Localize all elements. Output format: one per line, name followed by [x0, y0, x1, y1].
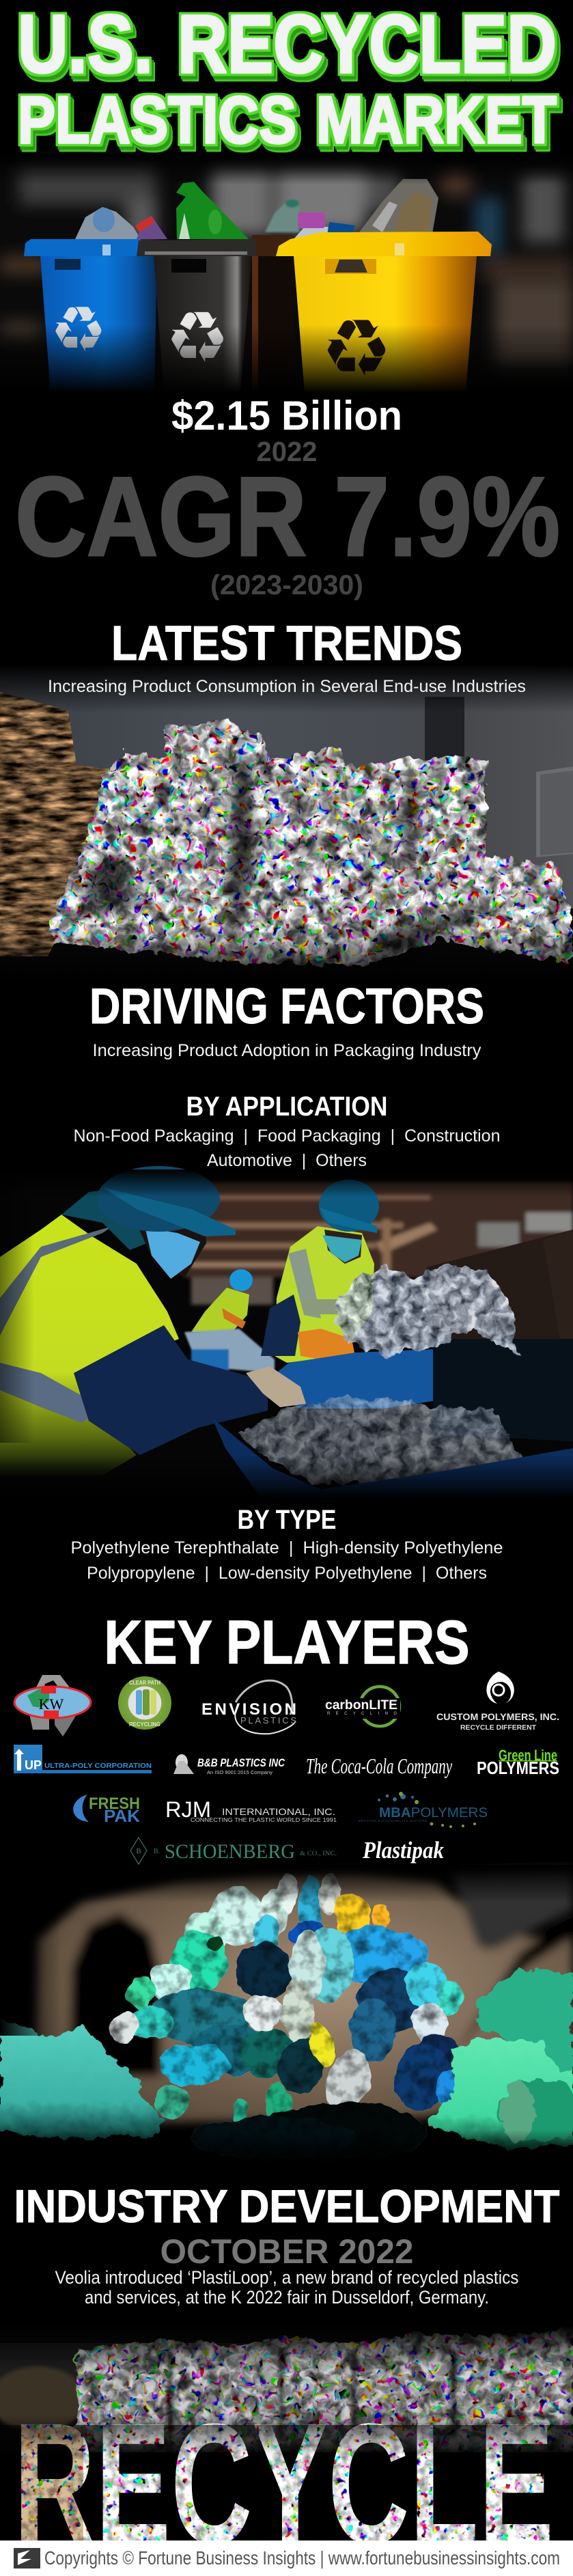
logo: RJM International: INTERNATIONAL, INC.	[222, 1806, 335, 1817]
logo: Ultra-Poly: ULTRA-POLY CORPORATION	[44, 1762, 152, 1770]
photo: ball of plastic bottles	[0, 1865, 573, 2179]
driving factor text: Increasing Product Adoption in Packaging Industry	[93, 1041, 481, 1060]
logo: B. Schoenberg	[130, 1838, 337, 1864]
title: U.S.	[18, 0, 153, 90]
ceiling beams	[184, 1182, 573, 1305]
bottles on back belt	[184, 1329, 275, 1373]
grey plastic bag	[357, 179, 438, 238]
heading: driving factors: DRIVING FACTORS	[89, 979, 484, 1034]
plastic bag	[335, 1264, 520, 1359]
blue behind bottle	[326, 222, 355, 239]
fades	[0, 1865, 573, 1902]
photo: baled plastic piles	[0, 665, 573, 991]
photo: plastic piles behind recycle lettering	[0, 2327, 573, 2452]
lead worker vest	[0, 1166, 306, 1476]
logo: KW: KW	[39, 1695, 64, 1713]
yellow bin	[276, 232, 492, 395]
logo: B. Schoenberg: B.	[154, 1848, 160, 1855]
logo: Clear Path Recycling: CLEAR PATH	[129, 1680, 160, 1686]
blurred warehouse backdrop	[0, 163, 573, 367]
far worker	[191, 1269, 253, 1332]
type list line 1: Polyethylene Terephthalate | High-density Polyethylene	[71, 1538, 503, 1557]
trend text: Increasing Product Consumption in Several End-use Industries	[48, 677, 526, 696]
logo: RJM International: RJM	[165, 1797, 211, 1822]
clear bag with blue bottle	[75, 207, 167, 239]
logo: MBA Polymers: MBAPOLYMERS	[379, 1805, 488, 1820]
logo: Coca-Cola: The Coca-Cola Company	[306, 1754, 453, 1778]
development date: OCTOBER 2022	[160, 2232, 414, 2271]
logo: Custom Polymers: RECYCLE DIFFERENT	[460, 1724, 536, 1732]
black bin: ♻	[165, 296, 229, 379]
title: PLASTICS	[18, 83, 296, 157]
wall columns	[425, 697, 464, 762]
logo: RJM International: CONNECTING THE PLASTIC WORLD SINCE 1991	[191, 1816, 337, 1823]
cardboard bales	[0, 690, 113, 960]
type list line 2: Polypropylene | Low-density Polyethylene | Others	[87, 1564, 487, 1583]
heading: by application: BY APPLICATION	[186, 1092, 388, 1122]
footer	[0, 2540, 573, 2576]
logo: MBA Polymers	[359, 1792, 488, 1828]
black bin	[137, 239, 256, 393]
second worker	[261, 1180, 379, 1363]
logo: Envision Plastics: PLASTICS	[240, 1715, 296, 1726]
logo: Envision Plastics: ENVISION	[201, 1700, 296, 1719]
logo: Ultra-Poly	[14, 1745, 152, 1773]
logo: Ultra-Poly: UP	[25, 1758, 42, 1772]
forecast period: (2023-2030)	[210, 569, 363, 600]
application list line 1: Non-Food Packaging | Food Packaging | Construction	[74, 1126, 500, 1146]
development text line 1: Veolia introduced ‘PlastiLoop’, a new brand of recycled plastics	[55, 2267, 519, 2288]
logo: carbonLITE	[325, 1687, 400, 1726]
logo: B&B Plastics: An ISO 9001:2015 Company	[207, 1769, 272, 1775]
blue bin: ♻	[51, 293, 107, 366]
logo: Fresh Pak: FRESH	[89, 1795, 140, 1813]
heading: latest trends: LATEST TRENDS	[111, 617, 462, 671]
logo: Fresh Pak: PAK	[104, 1807, 140, 1826]
crevices	[82, 758, 492, 960]
fades	[0, 665, 573, 712]
base year: 2022	[257, 436, 317, 467]
blue bin	[24, 239, 157, 393]
logo: B. Schoenberg: B	[136, 1847, 141, 1855]
pale background bottle	[265, 199, 299, 232]
sphere of bottles	[110, 1873, 467, 2160]
logo: B. Schoenberg: SCHOENBERG	[165, 1840, 295, 1863]
right dark panels	[427, 1230, 573, 1339]
development text line 2: and services, at the K 2022 fair in Dusseldorf, Germany.	[85, 2287, 489, 2308]
dim piles	[76, 2329, 573, 2463]
left brown bale	[0, 2366, 85, 2432]
logo: MBA Polymers: BECAUSE SUSTAINABILITY MATTERS	[359, 1819, 427, 1823]
front conveyor rim	[212, 1417, 573, 1503]
logo: Green Line Polymers: POLYMERS	[477, 1758, 559, 1778]
logo: Green Line Polymers	[477, 1747, 559, 1778]
logo: carbonLITE: carbonLITE	[325, 1698, 397, 1713]
logo: Custom Polymers	[436, 1672, 559, 1732]
yellow bin: ♻	[321, 303, 392, 395]
fades	[0, 1169, 573, 1197]
fades	[0, 154, 573, 184]
logo: Envision Plastics	[201, 1680, 296, 1734]
heading: by type: BY TYPE	[238, 1505, 336, 1535]
brown bin	[252, 235, 295, 393]
logo: Clear Path Recycling	[118, 1676, 171, 1730]
application list line 2: Automotive | Others	[207, 1151, 367, 1170]
soft top of lettering	[0, 2425, 573, 2456]
logo: carbonLITE: RECYCLING	[327, 1712, 397, 1716]
logo: B&B Plastics	[173, 1754, 285, 1775]
blue tub	[260, 1349, 437, 1409]
tint over first letter	[14, 2427, 83, 2540]
column gaps	[167, 2350, 456, 2439]
logo: B. Schoenberg: & CO., INC.	[300, 1850, 337, 1857]
logo: KW	[14, 1675, 91, 1736]
logo: Fresh Pak	[73, 1795, 140, 1826]
floor	[0, 909, 573, 991]
title	[18, 0, 557, 157]
logo: B&B Plastics: B&B PLASTICS INC	[197, 1756, 285, 1769]
icon: Fortune Business Insights logo	[14, 2548, 40, 2568]
door	[536, 766, 573, 857]
market value: $2.15 Billion	[171, 393, 402, 439]
plastic piles	[41, 717, 573, 970]
logo: Custom Polymers: CUSTOM POLYMERS, INC.	[436, 1711, 559, 1722]
left teal bags	[0, 2019, 164, 2138]
logo: RJM International	[165, 1797, 337, 1823]
heading: key players: KEY PLAYERS	[104, 1609, 470, 1677]
bottle trash	[236, 1394, 533, 1486]
water bottle with purple cap	[294, 212, 337, 239]
green bottle	[176, 182, 249, 239]
dark right tub	[433, 1339, 573, 1441]
photo: workers sorting plastic	[0, 1166, 573, 1506]
logo: Plastipak: Plastipak	[362, 1837, 444, 1864]
photo: recycling bins	[0, 154, 573, 403]
logo: Clear Path Recycling: RECYCLING	[129, 1721, 160, 1728]
right mint bags	[428, 1967, 573, 2148]
tan arches	[34, 1868, 573, 2124]
